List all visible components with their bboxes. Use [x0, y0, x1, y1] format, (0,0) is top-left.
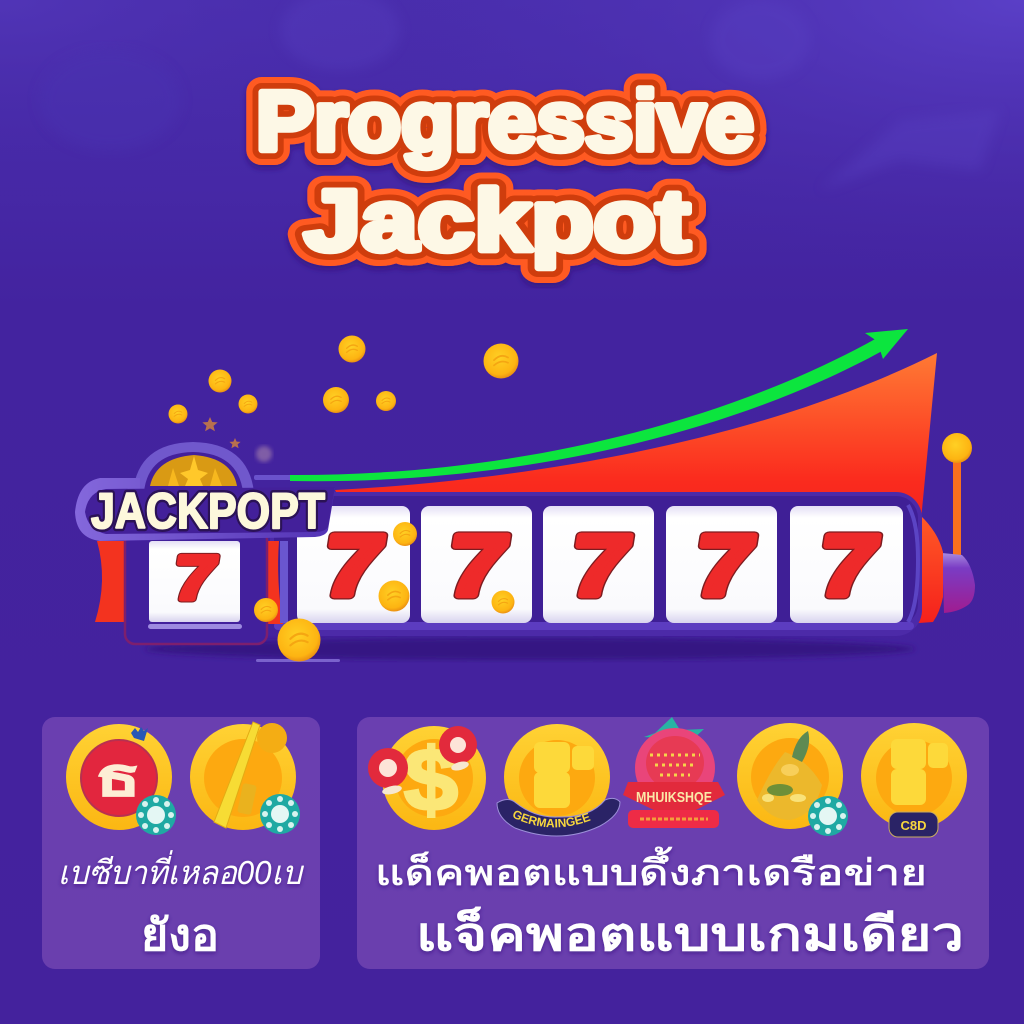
reel 2: [421, 506, 532, 623]
icon: dollar coin with red chips: [368, 726, 486, 830]
text: left line 1: เบซีบาที่เหลอ00เบ: [58, 850, 305, 891]
reel 3: [543, 506, 654, 623]
icon: coin with dark ribbon: [496, 724, 620, 836]
reel 5: 7: [812, 518, 885, 614]
reel 5: [790, 506, 903, 623]
reel 3: 7: [564, 518, 637, 614]
small jackpot machine: 7: [169, 544, 222, 613]
reel 4: 7: [688, 518, 761, 614]
reel 3: 7: [564, 518, 637, 614]
arch: [133, 442, 254, 492]
icon: red emblem with banner: MHUIKSHQE: [636, 789, 712, 806]
floating coins and stars: [168, 336, 518, 462]
text: left line 2: ยังอ: [141, 911, 219, 960]
machine shadow: [145, 638, 915, 660]
title line: Progressive: Progressive: [256, 74, 754, 168]
panel: left jackpot type: [42, 717, 320, 969]
icon: red emblem with banner: [623, 717, 725, 828]
icon: coin with C8D badge: [861, 723, 967, 837]
icon: red emblem coin: ธ: [95, 749, 141, 807]
side ribbons: [95, 541, 125, 622]
title line: Jackpot: Jackpot: [304, 173, 690, 269]
growth wedge: [335, 353, 937, 520]
reel 4: [666, 506, 777, 623]
icon: dollar coin with red chips: $: [404, 730, 458, 829]
panel: right jackpot types: [357, 717, 989, 969]
reel 1: [297, 506, 410, 623]
reel 1: 7: [317, 518, 390, 614]
small machine body: [125, 530, 267, 644]
title line: Jackpot: Jackpot: [304, 173, 690, 269]
slot reel frame: [270, 492, 922, 636]
icon: gold bar coin: [190, 722, 300, 834]
small jackpot machine: [95, 442, 288, 644]
reel 2: 7: [441, 518, 514, 614]
reel 5: 7: [812, 518, 885, 614]
title: [256, 74, 754, 269]
title line: Progressive: Progressive: [256, 74, 754, 168]
coins over reels: [254, 522, 514, 662]
text: single game jackpot: แจ็คพอตแบบเกมเดียว: [416, 906, 964, 960]
icon: red emblem coin: [66, 724, 176, 835]
title line: Jackpot: Jackpot: [304, 173, 690, 269]
jackpot banner: JACKPOPT: [91, 483, 325, 539]
small jackpot machine: 7: [169, 544, 222, 613]
reel 4: 7: [688, 518, 761, 614]
jackpot banner: JACKPOPT: [91, 483, 325, 539]
reel 2: 7: [441, 518, 514, 614]
icon: treasure coin with chip: [737, 723, 848, 836]
reel 1: 7: [317, 518, 390, 614]
icon: coin with dark ribbon: GERMAINGEE: [513, 810, 591, 828]
gold crown: [150, 455, 237, 486]
lever and end cap: [905, 433, 975, 624]
green growth arrow: [254, 329, 908, 481]
text: network jackpot: แด็คพอตแบบดึ้งภาเดรือข่าย: [375, 846, 927, 893]
icon: coin with C8D badge: C8D: [900, 818, 927, 833]
title line: Progressive: Progressive: [256, 74, 754, 168]
